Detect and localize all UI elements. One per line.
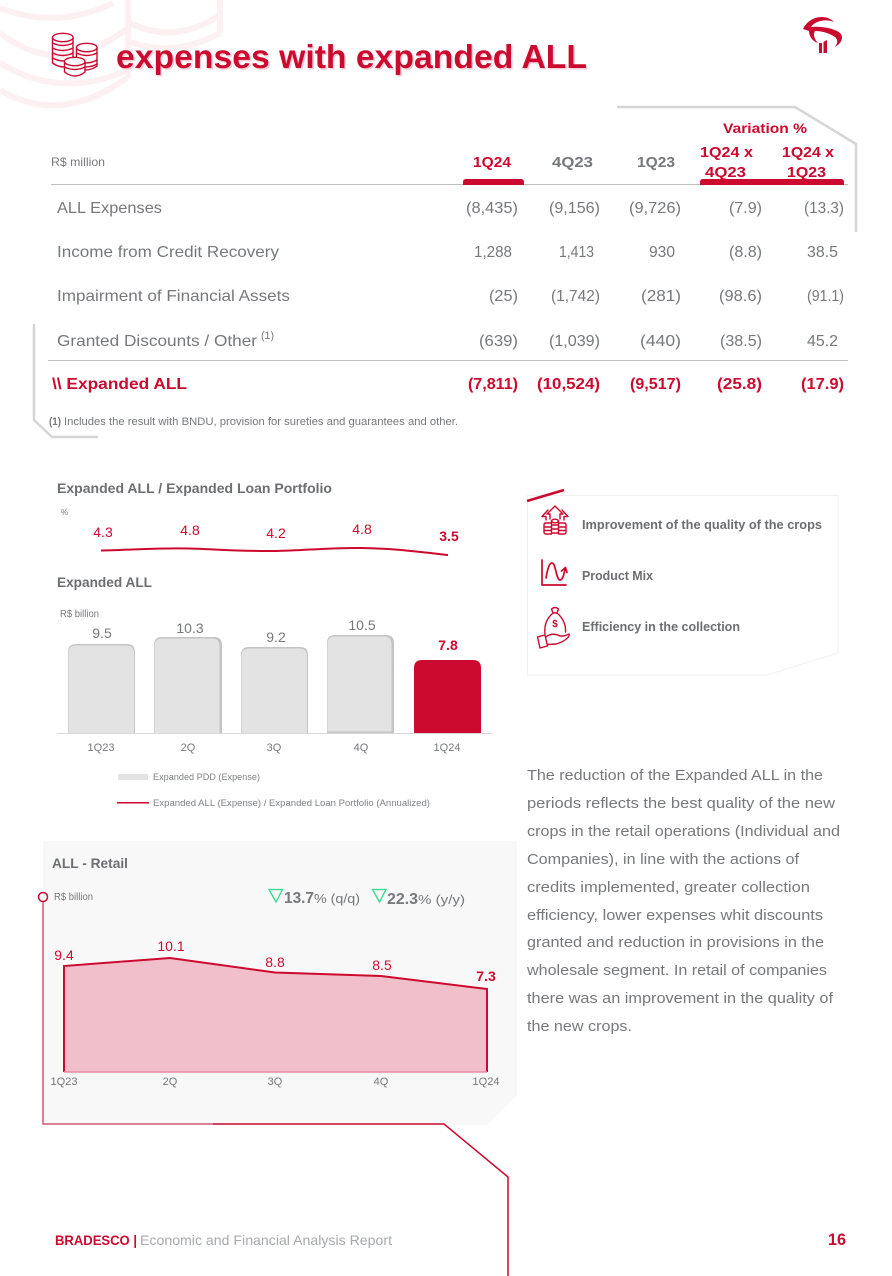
table header: Variation % (723, 120, 808, 136)
row: Expanded ALL total: (9,517) (630, 376, 681, 393)
chart: Expanded ALL / Expanded Loan Portfolio line: 4.8 (180, 522, 200, 538)
row: Expanded ALL total: \\ Expanded ALL (52, 376, 187, 393)
row: Granted Discounts / Other: Granted Discounts / Other (57, 333, 258, 350)
title: expenses with expanded ALL (116, 38, 587, 75)
text block: analysis paragraph: credits implemented, greater collection (527, 879, 810, 896)
row: Impairment of Financial Assets: (25) (489, 288, 518, 305)
row: Expanded ALL total: (17.9) (801, 376, 844, 393)
chart: Expanded ALL bars: 1Q23 (88, 742, 114, 754)
row: Granted Discounts / Other: (440) (640, 333, 681, 350)
chart: Expanded ALL / Expanded Loan Portfolio line: Expanded ALL / Expanded Loan Portfolio (57, 480, 332, 496)
panel: drivers (527, 490, 838, 675)
text block: analysis paragraph: The reduction of the Expanded ALL in the (527, 767, 823, 784)
row: ALL Expenses: (9,726) (629, 200, 681, 217)
variation y/y: 22.3 (387, 891, 418, 908)
text: product mix: Product Mix (582, 569, 653, 583)
chart: Expanded ALL bars: 7.8 (438, 637, 458, 653)
logo: Bradesco (803, 17, 842, 53)
variation q/q (269, 890, 360, 907)
row: Income from Credit Recovery: 1,288 (474, 244, 512, 261)
chart: Expanded ALL / Expanded Loan Portfolio line: 3.5 (439, 528, 459, 544)
icon: hand with money bag (538, 608, 569, 648)
chart: Expanded ALL bars: 10.3 (176, 620, 204, 636)
chart: Expanded ALL / Expanded Loan Portfolio line: 4.2 (266, 525, 286, 541)
table: expanded ALL expenses (48, 120, 848, 393)
chart: Expanded ALL bars: 1Q24 (434, 742, 460, 754)
chart: Expanded ALL bars (57, 574, 492, 754)
chart: Expanded ALL bars: 2Q (181, 742, 196, 754)
variation q/q: % (q/q) (314, 891, 360, 906)
table header: R$ million (51, 155, 105, 169)
icon: chart with curve (542, 560, 567, 585)
row: Granted Discounts / Other: (1,039) (549, 333, 600, 350)
chart: Expanded ALL / Expanded Loan Portfolio line: 4.3 (93, 524, 113, 540)
table header: 1Q23 (637, 154, 675, 171)
text block: analysis paragraph: wholesale segment. In retail of companies (526, 962, 827, 979)
table header: 1Q23 (787, 164, 826, 181)
row: Income from Credit Recovery: 1,413 (559, 244, 594, 261)
row: Granted Discounts / Other: (38.5) (720, 333, 762, 350)
text: improvement of quality: Improvement of the quality of the crops (582, 518, 822, 532)
text block: analysis paragraph: periods reflects the best quality of the new (527, 795, 835, 812)
title: expenses with expanded ALL (118, 40, 588, 76)
text block: analysis paragraph: granted and reduction in provisions in the (527, 934, 824, 951)
row: Expanded ALL total (52, 376, 844, 393)
legend (117, 772, 430, 809)
footer: 16 (828, 1230, 846, 1249)
table header: 4Q23 (705, 164, 746, 181)
text block: analysis paragraph (526, 767, 840, 1035)
decorative connector line (38, 892, 508, 1276)
row: Granted Discounts / Other: 45.2 (807, 333, 838, 350)
row: ALL Expenses: (13.3) (804, 200, 844, 217)
chart: Expanded ALL bars: 3Q (267, 742, 282, 754)
icon: arrow up with coins (542, 506, 568, 534)
row: Impairment of Financial Assets (57, 288, 844, 305)
row: Income from Credit Recovery: (8.8) (729, 244, 762, 261)
text block: analysis paragraph: crops in the retail operations (Individual and (527, 823, 840, 840)
icon: coin stacks (52, 33, 97, 76)
row: ALL Expenses: ALL Expenses (57, 200, 162, 217)
table header: 1Q24 (473, 154, 512, 171)
row: ALL Expenses: (7.9) (729, 200, 762, 217)
area chart: retail ALL: 8.5 (372, 957, 392, 973)
icon: hand with money bag: $ (552, 619, 558, 630)
footer: Economic and Financial Analysis Report (140, 1232, 392, 1248)
text block: analysis paragraph: the new crops. (527, 1018, 632, 1035)
row: ALL Expenses (57, 200, 844, 217)
area chart: retail ALL: 10.1 (157, 938, 185, 954)
text block: analysis paragraph: there was an improvement in the quality of (527, 990, 834, 1007)
variation y/y (372, 890, 465, 908)
chart: Expanded ALL bars: 9.2 (266, 629, 286, 645)
chart: Expanded ALL bars: R$ billion (60, 609, 99, 620)
area chart: retail ALL: 1Q23 (51, 1076, 77, 1088)
area chart: retail ALL: 8.8 (265, 954, 285, 970)
chart: Expanded ALL / Expanded Loan Portfolio line: % (61, 508, 68, 517)
chart: Expanded ALL bars: 9.5 (92, 625, 112, 641)
text: efficiency in collection: Efficiency in the collection (582, 620, 740, 634)
row: Income from Credit Recovery (57, 244, 838, 261)
text block: analysis paragraph: Companies), in line with the actions of (527, 851, 800, 868)
variation y/y: % (y/y) (418, 892, 465, 907)
table header: 4Q23 (552, 154, 593, 171)
chart: Expanded ALL bars: 10.5 (348, 617, 376, 633)
footnote: (1) (49, 416, 61, 428)
row: Granted Discounts / Other (57, 330, 838, 350)
row: Expanded ALL total: (7,811) (468, 376, 518, 393)
chart: Expanded ALL / Expanded Loan Portfolio line: 4.8 (352, 521, 372, 537)
row: Income from Credit Recovery: Income from Credit Recovery (57, 244, 279, 261)
table header: 1Q24 x (782, 144, 835, 161)
chart: Expanded ALL bars: Expanded ALL (57, 574, 152, 590)
panel: ALL - Retail: R$ billion (54, 892, 93, 903)
area chart: retail ALL: 4Q (374, 1076, 389, 1088)
row: Impairment of Financial Assets: (98.6) (719, 288, 762, 305)
row: Expanded ALL total: (25.8) (717, 376, 762, 393)
row: Granted Discounts / Other: (1) (261, 330, 274, 342)
row: Expanded ALL total: (10,524) (537, 376, 600, 393)
row: Income from Credit Recovery: 38.5 (807, 244, 838, 261)
area chart: retail ALL (51, 938, 499, 1088)
area chart: retail ALL: 9.4 (54, 947, 74, 963)
row: ALL Expenses: (8,435) (466, 200, 518, 217)
panel: ALL - Retail (43, 841, 517, 1125)
row: ALL Expenses: (9,156) (549, 200, 600, 217)
legend: Expanded PDD (Expense) (153, 772, 260, 783)
area chart: retail ALL: 3Q (268, 1076, 283, 1088)
row: Impairment of Financial Assets: (281) (641, 288, 681, 305)
row: Impairment of Financial Assets: (1,742) (551, 288, 600, 305)
area chart: retail ALL: 1Q24 (473, 1076, 499, 1088)
text block: analysis paragraph: efficiency, lower expenses whit discounts (527, 907, 823, 924)
row: Impairment of Financial Assets: (91.1) (807, 288, 844, 305)
row: Granted Discounts / Other: (639) (479, 333, 518, 350)
area chart: retail ALL: 7.3 (476, 968, 496, 984)
legend: Expanded ALL (Expense) / Expanded Loan Portfolio (Annualized) (153, 798, 430, 809)
footer (55, 1230, 846, 1249)
chart: Expanded ALL / Expanded Loan Portfolio line (57, 480, 459, 555)
heading: ALL - Retail: ALL - Retail (52, 855, 128, 871)
row: Impairment of Financial Assets: Impairment of Financial Assets (57, 288, 290, 305)
chart: Expanded ALL bars: 4Q (354, 742, 369, 754)
table header (51, 120, 848, 185)
area chart: retail ALL: 2Q (163, 1076, 178, 1088)
table header: 1Q24 x (700, 144, 754, 161)
row: Income from Credit Recovery: 930 (649, 244, 675, 261)
footnote: Includes the result with BNDU, provision for sureties and guarantees and other. (64, 416, 458, 428)
variation q/q: 13.7 (284, 890, 314, 907)
footer: BRADESCO | (55, 1232, 137, 1248)
